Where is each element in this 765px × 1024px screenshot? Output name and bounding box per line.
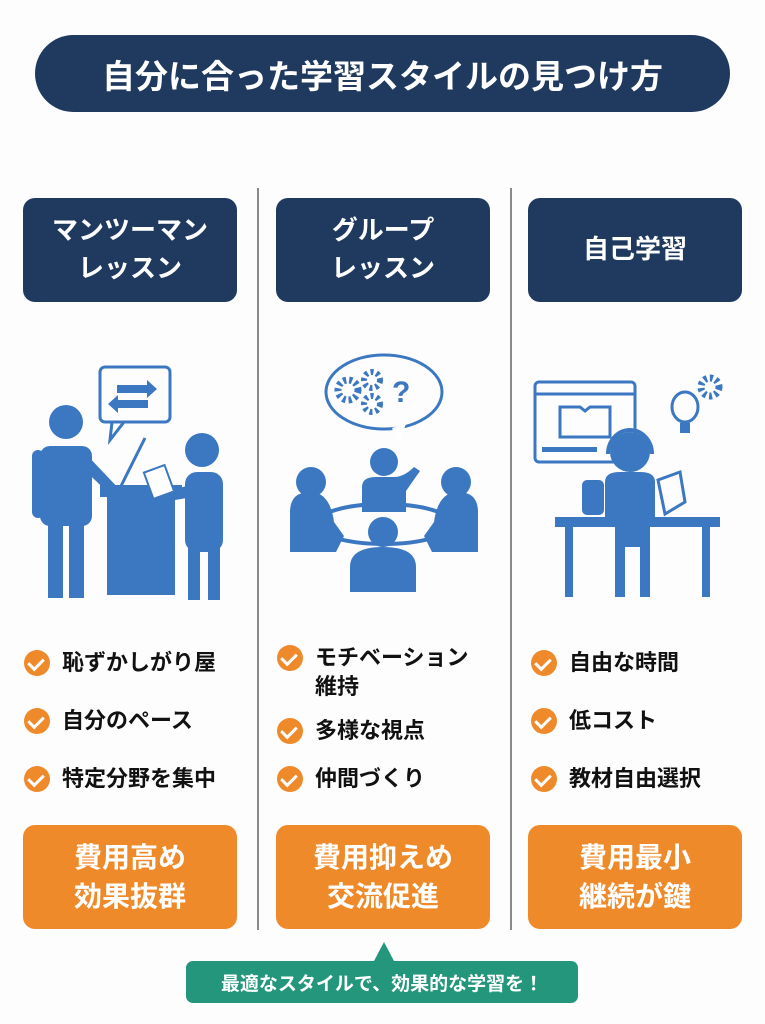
header: self-study: 自己学習 [583,234,687,264]
header: one-on-one: マンツーマン [52,215,208,245]
summary: one-on-one: 費用高め [74,842,186,873]
summary: one-on-one: 効果抜群 [74,881,186,912]
header: one-on-one [23,198,237,302]
header: self-study [528,198,742,302]
list: one-on-one: 自分のペース [62,708,193,733]
list: self-study: 低コスト [569,708,657,733]
callout [186,942,578,1003]
header: group: レッスン [331,253,435,283]
list: self-study: 教材自由選択 [569,766,701,791]
list: group: 仲間づくり [315,766,425,791]
list: group: 維持 [315,674,359,699]
list: one-on-one: 特定分野を集中 [62,766,216,791]
icon: group meeting: ? [392,376,410,409]
list: one-on-one [24,650,216,792]
list: group: モチベーション [315,645,469,670]
title: 自分に合った学習スタイルの見つけ方 [102,58,663,94]
header: group: グループ [332,215,434,245]
icon: self study [534,374,722,597]
title [35,35,730,112]
list: group: 多様な視点 [315,718,425,743]
icon: group meeting [290,354,478,592]
summary: self-study [528,825,742,929]
summary: group: 交流促進 [327,881,439,912]
summary: self-study: 費用最小 [579,842,691,873]
summary: group [276,825,490,929]
list: self-study [531,650,701,792]
summary: group: 費用抑えめ [313,842,453,873]
callout: 最適なスタイルで、効果的な学習を！ [221,974,543,994]
list: group [277,645,469,792]
list: one-on-one: 恥ずかしがり屋 [62,650,216,675]
summary: self-study: 継続が鍵 [579,881,691,912]
header: group [276,198,490,302]
summary: one-on-one [23,825,237,929]
list: self-study: 自由な時間 [569,650,679,675]
header: one-on-one: レッスン [78,253,182,283]
icon: teacher and student [32,366,223,600]
